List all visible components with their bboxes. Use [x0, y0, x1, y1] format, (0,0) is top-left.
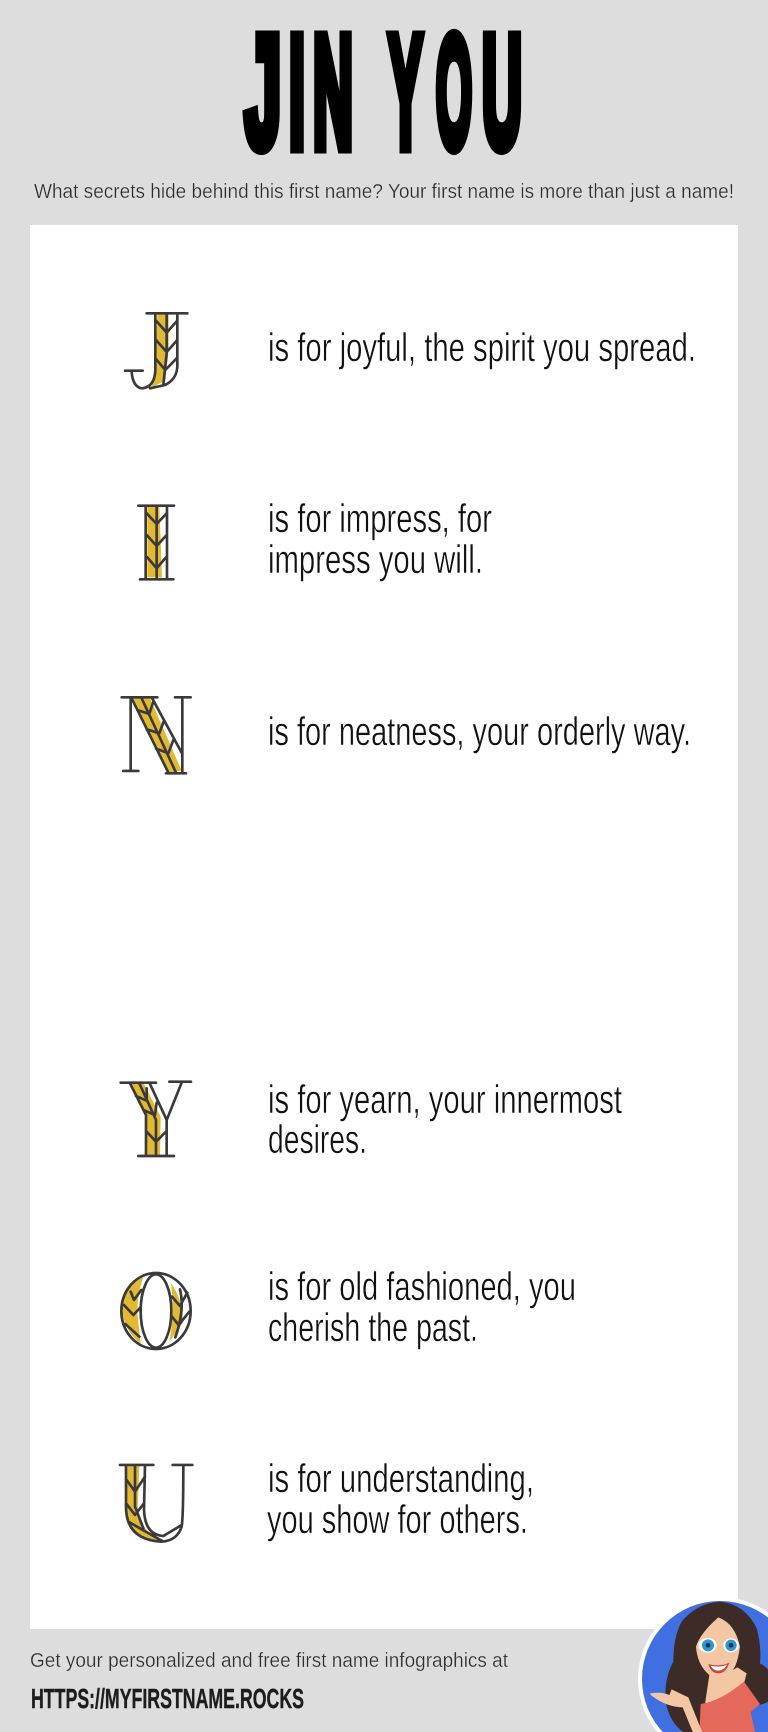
- row: I: [138, 497, 492, 579]
- row: J: [125, 313, 696, 388]
- row: U: [120, 1457, 534, 1542]
- row: N: [122, 697, 691, 773]
- title: Y: [389, 3, 422, 180]
- text: O first line: is for old fashioned, you: [268, 1265, 576, 1309]
- footer text: Get your personalized and free first name infographics at: [30, 1650, 508, 1672]
- row: O: [121, 1265, 576, 1349]
- icon: letter N: [122, 697, 191, 773]
- text: Y first line: is for yearn, your innermost: [268, 1078, 622, 1122]
- icon: letter O: [121, 1273, 191, 1349]
- title: J: [245, 5, 281, 180]
- text: I first line: is for impress, for: [268, 497, 492, 541]
- icon: letter I: [138, 506, 174, 579]
- text: U second line: you show for others.: [267, 1498, 528, 1542]
- text: U first line: is for understanding,: [268, 1457, 534, 1501]
- text: I second line: impress you will.: [268, 538, 483, 582]
- row: Y: [121, 1078, 622, 1156]
- text: O second line: cherish the past.: [268, 1306, 478, 1350]
- footer url: HTTPS://MYFIRSTNAME.ROCKS: [31, 1683, 304, 1714]
- title: [245, 3, 522, 181]
- panel: letters: [30, 225, 738, 1629]
- title: I: [289, 5, 305, 181]
- subtitle: What secrets hide behind this first name? Your first name is more than just a name!: [34, 181, 734, 203]
- avatar: [638, 1597, 768, 1732]
- icon: letter J: [125, 313, 187, 388]
- title: O: [436, 4, 472, 180]
- title: U: [482, 5, 522, 179]
- title: N: [313, 5, 353, 179]
- icon: letter Y: [121, 1082, 191, 1156]
- text: Y second line: desires.: [268, 1118, 367, 1162]
- icon: letter U: [120, 1465, 192, 1542]
